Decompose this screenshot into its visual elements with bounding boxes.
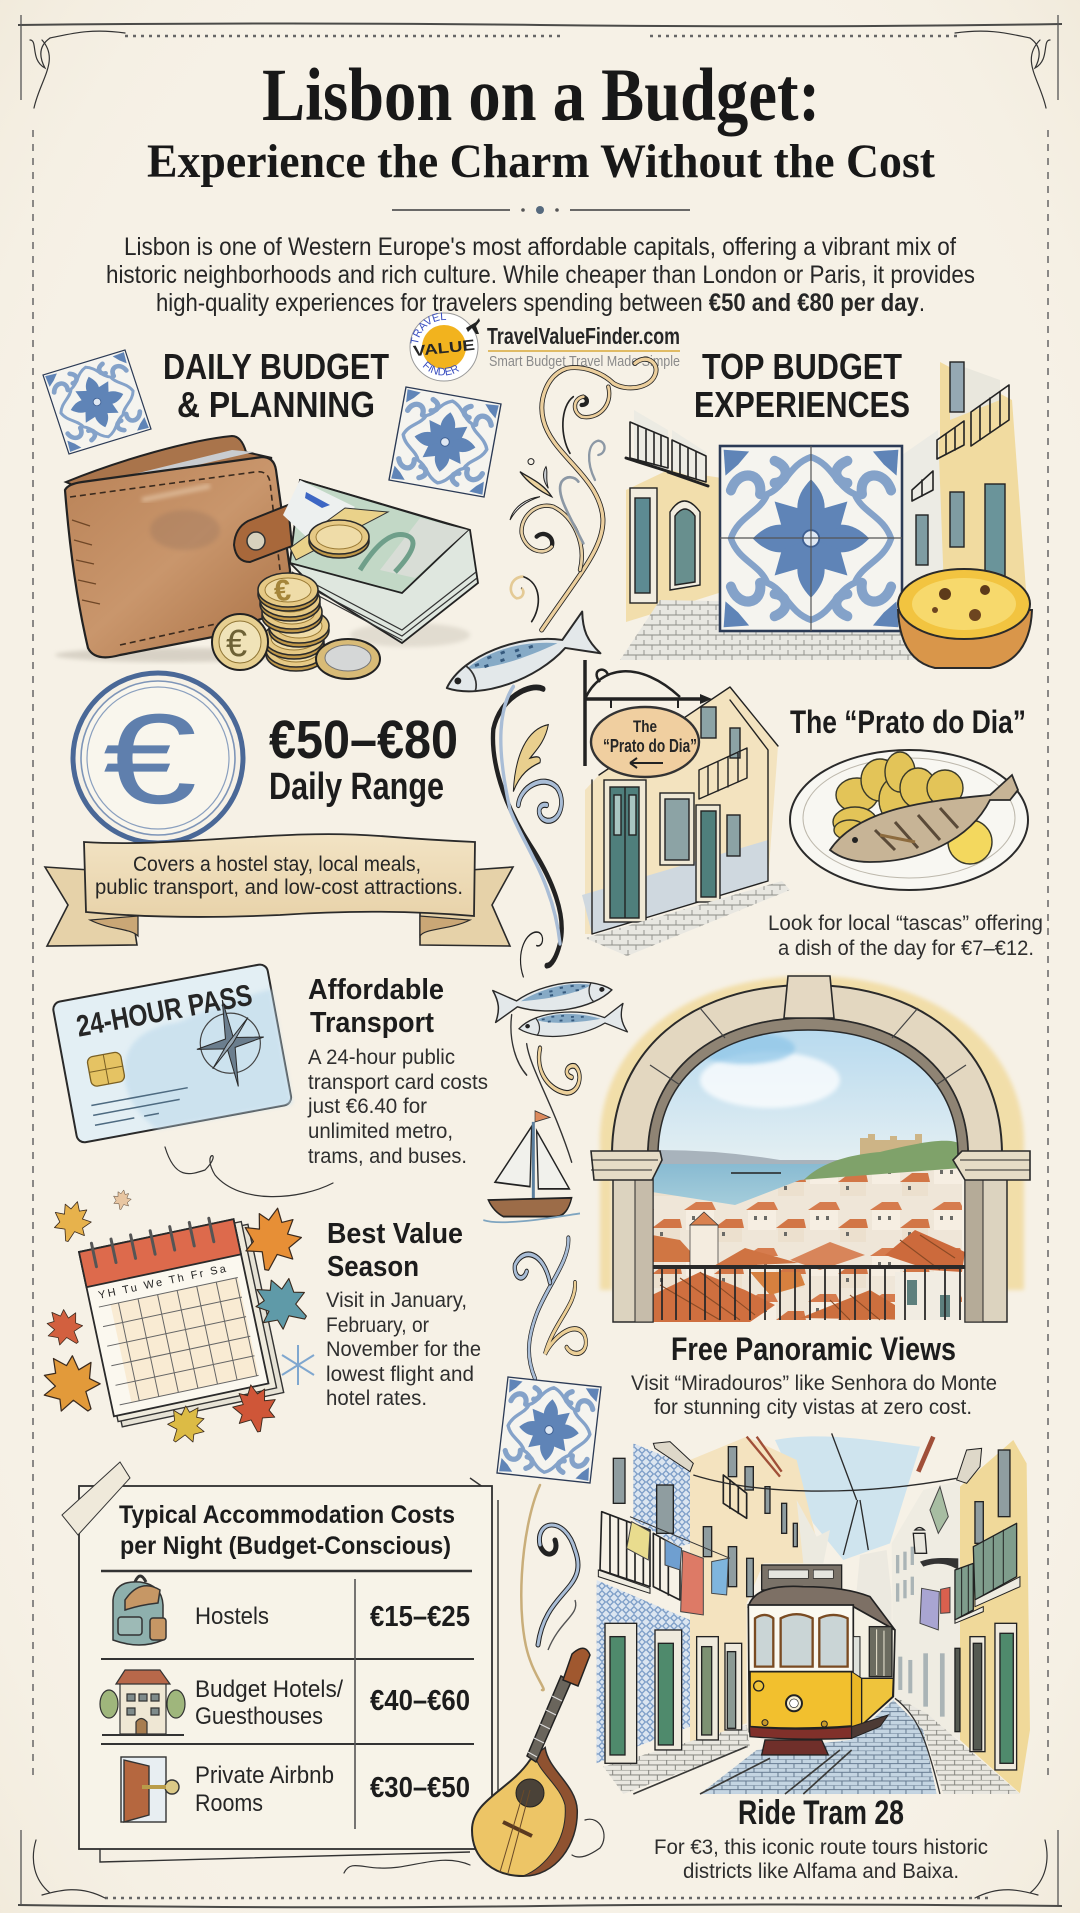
- text: transport description: just €6.40 for: [307, 1095, 427, 1118]
- panel heading: [119, 1501, 455, 1560]
- text: season description: [326, 1289, 481, 1410]
- heading: best value season: [327, 1218, 463, 1283]
- euro stamp: €: [103, 688, 197, 831]
- pastel de nata: [898, 569, 1032, 668]
- illustration: transport card: 24-HOUR PASS: [74, 979, 255, 1044]
- panel heading: per Night (Budget-Conscious): [120, 1532, 451, 1560]
- illustration: tasca street with Prato do Dia sign: “Prato do Dia”: [603, 736, 697, 756]
- text: transport description: unlimited metro,: [308, 1120, 453, 1143]
- heading: best value season: Season: [327, 1251, 419, 1283]
- town: [652, 1168, 962, 1320]
- balcony: [699, 748, 747, 799]
- text: transport description: trams, and buses.: [308, 1145, 467, 1168]
- text: season description: February, or: [326, 1314, 429, 1337]
- row: budget hotels: [195, 1676, 470, 1730]
- text: tram description: districts like Alfama and Baixa.: [683, 1860, 959, 1883]
- left balconies: [626, 422, 708, 486]
- icon: azulejo tile left: [43, 350, 151, 454]
- logo: TravelValueFinder: VALUE: [412, 337, 476, 360]
- sky: [775, 1436, 920, 1560]
- left buildings: [690, 1437, 817, 1743]
- doors: [605, 1623, 1017, 1770]
- street lamp: [913, 1527, 958, 1570]
- building facade: [585, 687, 778, 934]
- illustration: Tram 28 street: [597, 1433, 1030, 1794]
- row: budget hotels: €40–€60: [370, 1685, 470, 1717]
- heading: top budget experiences: EXPERIENCES: [694, 384, 910, 425]
- logo: TravelValueFinder: TRAVEL: [410, 312, 446, 344]
- subtitle: Experience the Charm Without the Cost: [147, 135, 935, 188]
- row: private airbnb: Rooms: [195, 1790, 263, 1817]
- row: private airbnb: Private Airbnb: [195, 1762, 334, 1789]
- icon: sardine: [438, 611, 600, 707]
- heading: affordable transport: Transport: [310, 1007, 434, 1039]
- left doors: [630, 488, 700, 603]
- daily range figure: [269, 710, 458, 808]
- illustration: calendar with autumn leaves: [30, 1188, 318, 1452]
- roof eaves: [747, 1437, 782, 1477]
- heading: best value season: Best Value: [327, 1218, 463, 1250]
- text: season description: lowest flight and: [326, 1363, 474, 1386]
- text: tascas tip: [768, 912, 1043, 960]
- illustration: wallet with euros and coins: €: [226, 623, 247, 665]
- hanging sign bracket: [585, 660, 705, 766]
- heading: top budget experiences: TOP BUDGET: [702, 346, 902, 387]
- stone arch: [612, 985, 1002, 1155]
- text: transport description: [307, 1046, 488, 1168]
- laundry: [630, 1517, 730, 1558]
- intro paragraph: high-quality experiences for travelers spending between €50 and €80 per day.: [156, 289, 925, 317]
- ornament: swirl above lower tile: [515, 1238, 586, 1379]
- heading: prato do dia: The “Prato do Dia”: [790, 704, 1026, 740]
- text: miradouros description: Visit “Miradouros” like Senhora do Monte: [631, 1372, 997, 1395]
- text: season description: hotel rates.: [326, 1387, 427, 1410]
- cobbles: [585, 881, 790, 956]
- heading: daily budget and planning: DAILY BUDGET: [163, 346, 389, 387]
- sea: [652, 1160, 882, 1210]
- illustration: arch with Lisbon view: [591, 976, 1030, 1322]
- logo: TravelValueFinder: FINDER: [422, 361, 460, 376]
- panel: accommodation costs table: [62, 1462, 498, 1862]
- row: budget hotels: Guesthouses: [195, 1703, 323, 1730]
- icon: two sardines: [491, 972, 627, 1041]
- heading: ride tram 28: Ride Tram 28: [738, 1794, 904, 1832]
- rails: [633, 1747, 852, 1794]
- logo: TravelValueFinder: [410, 312, 680, 382]
- intro paragraph: [106, 233, 975, 317]
- intro paragraph: Lisbon is one of Western Europe's most affordable capitals, offering a vibrant mix of: [124, 233, 956, 261]
- ornament: swirl below lower tile: [521, 1485, 578, 1690]
- logo: TravelValueFinder: TravelValueFinder.com: [487, 323, 680, 349]
- heading: daily budget and planning: [163, 346, 389, 425]
- euro stamp: [73, 673, 243, 843]
- row: private airbnb: [195, 1762, 470, 1817]
- ornament: flourish below card: [165, 1147, 333, 1197]
- heading: free panoramic views: Free Panoramic Views: [671, 1331, 956, 1367]
- castle and hill: [860, 1134, 922, 1160]
- doors: [604, 707, 740, 922]
- illustration: street with large azulejo and pastel de nata: [620, 362, 1032, 668]
- big azulejo panel: [720, 446, 902, 631]
- row: hostels: €15–€25: [370, 1601, 470, 1633]
- panel heading: Typical Accommodation Costs: [119, 1501, 455, 1529]
- text: miradouros description: [631, 1372, 997, 1419]
- ornament: upper scrollwork: [510, 359, 656, 630]
- tram: [748, 1565, 895, 1755]
- icon: sailboat: [483, 1111, 580, 1222]
- ribbon banner: public transport, and low-cost attractions.: [95, 876, 463, 899]
- row: hostels: Hostels: [195, 1603, 269, 1630]
- icon: backpack: [113, 1576, 166, 1645]
- heading: top budget experiences: [694, 346, 910, 425]
- text: season description: Visit in January,: [326, 1289, 467, 1312]
- ribbon banner: Covers a hostel stay, local meals,: [133, 853, 421, 876]
- illustration: transport card: [52, 963, 292, 1144]
- columns and capitals: [591, 1151, 1030, 1322]
- text: tram description: For €3, this iconic route tours historic: [654, 1836, 988, 1859]
- ornament: lines and gold curl above boat: [511, 1015, 580, 1162]
- arch watercolor wash: [600, 976, 1024, 1290]
- sky: [652, 1018, 962, 1320]
- heading: affordable transport: [308, 974, 444, 1039]
- railing: [646, 1267, 970, 1320]
- row: hostels: [195, 1601, 470, 1633]
- heading: daily budget and planning: & PLANNING: [177, 384, 375, 425]
- text: season description: November for the: [326, 1338, 481, 1361]
- windows: [613, 1447, 1010, 1597]
- text: transport description: transport card costs: [308, 1071, 488, 1094]
- intro paragraph: historic neighborhoods and rich culture. While cheaper than London or Paris, it provides: [106, 261, 975, 289]
- text: tascas tip: Look for local “tascas” offering: [768, 912, 1043, 935]
- illustration: calendar with autumn leaves: YH Tu We Th Fr Sa: [97, 1263, 228, 1302]
- title: Lisbon on a Budget:: [262, 54, 820, 137]
- icon: guesthouse: [100, 1670, 185, 1735]
- text: tascas tip: a dish of the day for €7–€12.: [778, 937, 1034, 960]
- illustration: plate of fish and potatoes: [790, 750, 1028, 890]
- heading: affordable transport: Affordable: [308, 974, 444, 1006]
- right buildings: [960, 1440, 1030, 1793]
- text: miradouros description: for stunning city vistas at zero cost.: [654, 1396, 972, 1419]
- icon: azulejo tile right: [389, 387, 501, 497]
- right balconies and windows: [912, 385, 1009, 501]
- balconies: [600, 1475, 1017, 1620]
- wires and pole: [693, 1433, 957, 1555]
- illustration: tasca street with Prato do Dia sign: The: [633, 717, 657, 736]
- ground: [603, 1725, 750, 1794]
- title divider: [392, 206, 690, 214]
- logo: TravelValueFinder: Smart Budget Travel Made Simple: [489, 353, 680, 370]
- daily range figure: €50–€80: [269, 710, 458, 770]
- ribbon banner: [45, 834, 513, 946]
- daily range figure: Daily Range: [269, 766, 444, 808]
- icon: Portuguese guitar: [344, 1648, 604, 1876]
- left facade wash: [626, 470, 722, 622]
- illustration: tasca street with Prato do Dia sign: [582, 660, 790, 956]
- icon: azulejo tile lower: [497, 1377, 601, 1483]
- compass: [189, 994, 272, 1093]
- ornament: middle scrollwork: [493, 687, 562, 977]
- cobbles: [620, 600, 960, 660]
- right facade wash: [902, 362, 1026, 610]
- icon: door with key: [121, 1757, 179, 1822]
- illustration: wallet with euros and coins: €: [272, 574, 293, 608]
- row: budget hotels: Budget Hotels/: [195, 1676, 343, 1703]
- text: tram description: [654, 1836, 988, 1883]
- row: private airbnb: €30–€50: [370, 1772, 470, 1804]
- text: transport description: A 24-hour public: [308, 1046, 455, 1069]
- illustration: wallet with euros and coins: [55, 436, 478, 679]
